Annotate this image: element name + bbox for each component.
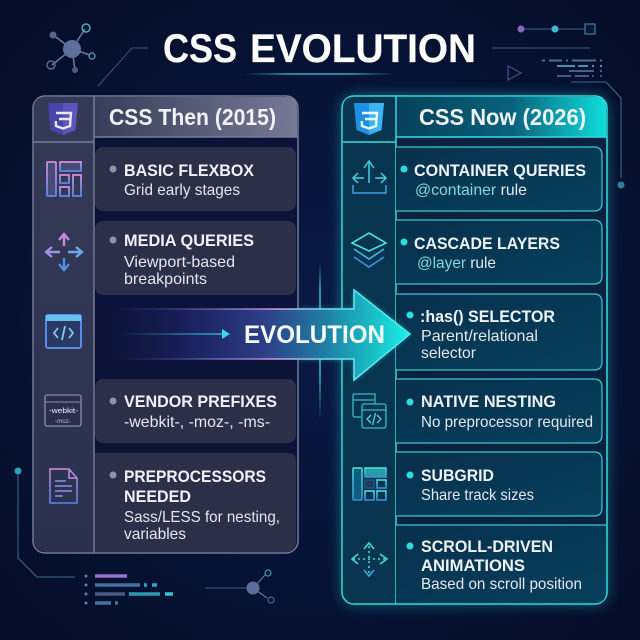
card: preprocessors needed: Sass/LESS for nesting,	[124, 509, 280, 526]
header text: then: CSS Then (2015)	[109, 104, 276, 130]
card: media queries: MEDIA QUERIES	[124, 231, 254, 250]
icon: code window then	[46, 315, 81, 348]
icon: scroll arrows	[352, 543, 387, 576]
card: preprocessors needed: variables	[124, 526, 186, 543]
icon: layout grid then	[47, 162, 81, 196]
card: cascade layers: CASCADE LAYERS	[414, 234, 560, 253]
card: preprocessors needed: PREPROCESSORS	[124, 467, 266, 486]
icon: container queries	[353, 161, 386, 193]
card: preprocessors needed: NEEDED	[124, 487, 191, 506]
title: CSS	[163, 27, 237, 71]
card: media queries: Viewport-based	[124, 254, 235, 271]
sidebar: now	[343, 97, 396, 603]
card: container queries: CONTAINER QUERIES	[414, 161, 586, 180]
header text: now: CSS Now (2026)	[419, 104, 586, 130]
card: basic flexbox: BASIC FLEXBOX	[124, 161, 255, 180]
card: has selector: :has() SELECTOR	[420, 307, 555, 326]
card: native nesting	[396, 379, 602, 443]
card: subgrid	[396, 452, 602, 516]
decoration: network node bottom	[205, 570, 274, 603]
header bar: then	[94, 97, 297, 137]
card: native nesting: No preprocessor required	[421, 414, 593, 431]
card: scroll-driven animations	[396, 525, 606, 603]
panel: CSS Then (2015)	[33, 96, 298, 553]
decoration: nodes and code lines top right	[492, 24, 624, 188]
title: EVOLUTION	[250, 27, 476, 71]
sidebar: then	[34, 97, 94, 552]
card: has selector	[396, 294, 602, 370]
icon: four arrows then	[46, 234, 82, 270]
card: cascade layers: @layer rule	[417, 255, 496, 272]
card: container queries	[396, 147, 602, 211]
card: vendor prefixes: -webkit-, -moz-, -ms-	[124, 414, 270, 431]
arrow label: EVOLUTION	[244, 321, 385, 349]
icon: CSS3 shield then	[48, 103, 78, 135]
card: has selector: selector	[421, 345, 477, 362]
card: subgrid: SUBGRID	[421, 466, 494, 485]
card: media queries: breakpoints	[124, 271, 207, 288]
card: subgrid: Share track sizes	[421, 487, 534, 504]
icon: document	[50, 469, 77, 503]
decoration: network node top left	[47, 24, 148, 86]
icon: nested code windows	[353, 394, 386, 428]
card: scroll-driven animations: SCROLL-DRIVEN	[421, 537, 553, 556]
card: has selector: Parent/relational	[421, 328, 538, 345]
icon: vendor prefix window: -webkit-	[49, 408, 79, 415]
icon: layers	[352, 233, 386, 267]
card: container queries: @container rule	[415, 182, 527, 199]
card: native nesting: NATIVE NESTING	[421, 392, 556, 411]
connector stubs between panels	[319, 262, 321, 420]
card: vendor prefixes: VENDOR PREFIXES	[124, 392, 277, 411]
card: media queries	[95, 221, 296, 295]
icon: vendor prefix window: -moz-	[55, 419, 71, 425]
card: scroll-driven animations: Based on scroll position	[421, 576, 582, 593]
card: scroll-driven animations: ANIMATIONS	[421, 556, 525, 575]
icon: vendor prefix window	[45, 395, 81, 426]
card: basic flexbox: Grid early stages	[124, 182, 240, 199]
card: preprocessors needed	[95, 453, 296, 552]
icon: subgrid	[353, 468, 386, 500]
header bar: now	[396, 97, 606, 137]
card: vendor prefixes	[95, 379, 296, 443]
panel: CSS Now (2026)	[342, 96, 607, 604]
decoration: circuit and code lines bottom left	[14, 468, 173, 604]
title	[163, 27, 476, 74]
icon: CSS3 shield now	[354, 103, 384, 135]
arrow: evolution	[110, 290, 410, 380]
card: basic flexbox	[95, 147, 296, 211]
card: cascade layers	[396, 220, 602, 284]
